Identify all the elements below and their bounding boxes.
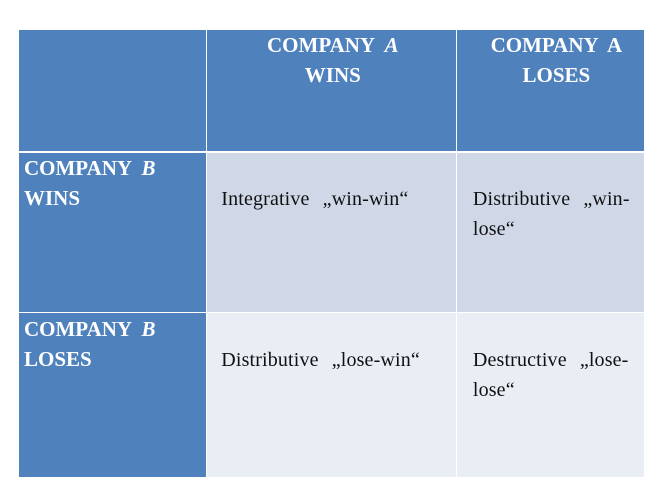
cell: destructive lose-lose (457, 313, 644, 477)
row header: company B wins (19, 153, 206, 312)
row header: company B loses: LOSES (24, 347, 92, 371)
header cell: empty corner (19, 30, 206, 151)
cell: integrative win-win (207, 153, 456, 312)
row header: company B wins: COMPANY B (24, 156, 156, 180)
column header: company A wins (207, 30, 456, 151)
row header: company B loses (19, 313, 206, 477)
cell: destructive lose-lose: Destructive „lose- (473, 349, 628, 371)
column header: company A wins: WINS (305, 63, 361, 87)
cell: distributive win-lose (457, 153, 644, 312)
cell: distributive lose-win (207, 313, 456, 477)
row header: company B wins: WINS (24, 186, 80, 210)
column header: company A loses: LOSES (523, 63, 590, 87)
column header: company A loses: COMPANY A (491, 33, 622, 57)
cell: destructive lose-lose: lose“ (473, 379, 515, 401)
cell: distributive win-lose: Distributive „win- (473, 188, 630, 210)
row header: company B loses: COMPANY B (24, 317, 156, 341)
column header: company A loses (457, 30, 644, 151)
column header: company A wins: COMPANY A (267, 33, 399, 57)
cell: distributive win-lose: lose“ (473, 218, 515, 240)
cell: distributive lose-win: Distributive „lose-win“ (221, 349, 420, 371)
cell: integrative win-win: Integrative „win-win“ (221, 188, 408, 210)
